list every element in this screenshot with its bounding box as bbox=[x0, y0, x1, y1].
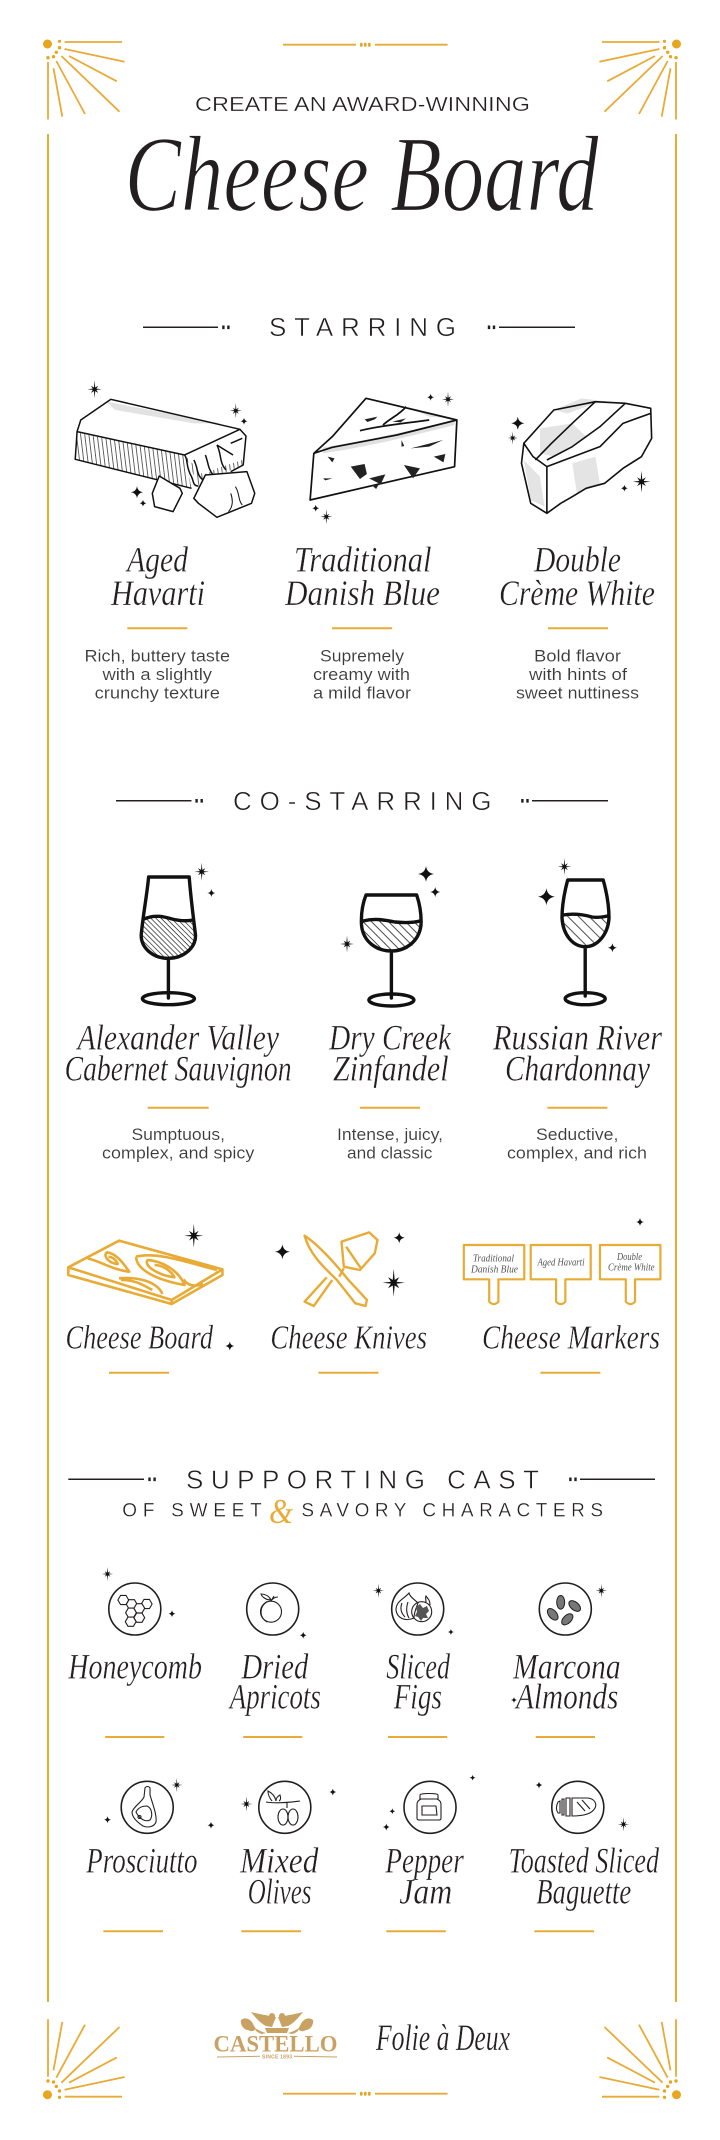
title kicker: CREATE AN AWARD-WINNING bbox=[195, 94, 530, 116]
sparkles bbox=[240, 1788, 336, 1812]
item: prosciutto bbox=[86, 1778, 214, 1931]
name bbox=[385, 1841, 465, 1911]
item: mixed olives bbox=[239, 1781, 336, 1931]
item: pepper jam bbox=[383, 1775, 476, 1931]
name: Honeycomb bbox=[68, 1646, 202, 1686]
description: complex, and rich bbox=[507, 1143, 647, 1162]
name: Aged bbox=[125, 540, 189, 580]
name: Double bbox=[533, 540, 621, 580]
description: Sumptuous, bbox=[132, 1125, 225, 1144]
description bbox=[516, 647, 639, 702]
frame ornament: bottom left corner bbox=[43, 2019, 125, 2099]
name bbox=[492, 1017, 663, 1089]
tool: cheese knives bbox=[270, 1232, 427, 1373]
name: Jam bbox=[399, 1871, 452, 1911]
frame ornament: top left corner bbox=[43, 40, 125, 120]
description: Bold flavor bbox=[534, 647, 621, 666]
icon: apricot bbox=[247, 1583, 299, 1635]
description: Rich, buttery taste bbox=[84, 647, 230, 666]
icon: olive branch bbox=[259, 1781, 311, 1833]
icon: crossed knives bbox=[305, 1232, 378, 1306]
name: Alexander Valley bbox=[76, 1017, 279, 1057]
name: Dry Creek bbox=[328, 1017, 452, 1057]
logo: castello: SINCE 1893 bbox=[262, 2054, 292, 2060]
description bbox=[84, 647, 230, 702]
marker labels: Aged Havarti bbox=[537, 1256, 584, 1268]
name: Cheese Board bbox=[66, 1319, 214, 1356]
icon: wooden board bbox=[68, 1241, 222, 1304]
description: Seductive, bbox=[536, 1125, 618, 1144]
sparkles bbox=[104, 1778, 214, 1829]
description: sweet nuttiness bbox=[516, 683, 639, 702]
tool: cheese board bbox=[66, 1224, 234, 1373]
name bbox=[386, 1646, 451, 1716]
name bbox=[284, 540, 440, 613]
name: Olives bbox=[248, 1871, 312, 1911]
logo: castello bbox=[214, 2012, 338, 2060]
description bbox=[313, 647, 411, 702]
heading: starring: STARRING bbox=[269, 312, 456, 342]
item: dried apricots bbox=[228, 1583, 321, 1737]
name: Cabernet Sauvignon bbox=[65, 1049, 292, 1089]
icon: danish blue wedge bbox=[310, 398, 457, 500]
marker labels: Traditional bbox=[473, 1253, 514, 1265]
item: toasted sliced baguette bbox=[509, 1781, 660, 1931]
sparkles bbox=[508, 417, 650, 493]
icon: wine glass bbox=[141, 877, 196, 1005]
icon: wine glass bbox=[361, 895, 421, 1006]
sparkles bbox=[373, 1584, 454, 1635]
subheading: & bbox=[269, 1492, 294, 1531]
title bbox=[125, 94, 599, 235]
name: Toasted Sliced bbox=[509, 1841, 660, 1881]
name: Sliced bbox=[386, 1646, 451, 1686]
name bbox=[512, 1646, 621, 1716]
sparkles bbox=[275, 1232, 405, 1297]
name: Traditional bbox=[294, 540, 432, 580]
heading: supporting cast: SUPPORTING CAST bbox=[186, 1464, 539, 1494]
cheese: aged havarti bbox=[75, 380, 255, 702]
wine: dry creek zinfandel bbox=[328, 866, 452, 1162]
icon: ham bbox=[121, 1781, 173, 1833]
sparkles bbox=[87, 380, 248, 507]
icon: double creme white wedge bbox=[521, 398, 652, 513]
icon: three marker flags bbox=[464, 1245, 660, 1304]
icon: figs bbox=[392, 1583, 444, 1635]
description: a mild flavor bbox=[313, 683, 411, 702]
marker labels: Danish Blue bbox=[470, 1263, 518, 1275]
name: Crème White bbox=[499, 573, 655, 613]
name: Apricots bbox=[228, 1676, 321, 1716]
wine: alexander valley cabernet sauvignon bbox=[65, 863, 292, 1162]
sparkles bbox=[194, 863, 215, 897]
frame ornament: top centre bbox=[283, 43, 448, 47]
name bbox=[499, 540, 655, 613]
description: Intense, juicy, bbox=[337, 1125, 443, 1144]
description: Supremely bbox=[320, 647, 405, 666]
sparkles bbox=[536, 1782, 629, 1831]
cheese: traditional danish blue bbox=[284, 392, 457, 702]
description: and classic bbox=[347, 1143, 433, 1162]
name bbox=[65, 1017, 292, 1089]
subheading: OF SWEET bbox=[122, 1501, 262, 1522]
logo: folie a deux: Folie à Deux bbox=[375, 2018, 510, 2059]
icon: baguette bbox=[552, 1781, 604, 1833]
name bbox=[110, 540, 205, 613]
heading: starring bbox=[143, 312, 575, 342]
heading: co-starring: CO-STARRING bbox=[233, 786, 492, 816]
name: Chardonnay bbox=[505, 1049, 650, 1089]
name: Cheese Markers bbox=[482, 1319, 660, 1356]
name: Russian River bbox=[492, 1017, 663, 1057]
marker labels bbox=[470, 1251, 655, 1275]
description bbox=[337, 1125, 443, 1162]
title main: Cheese Board bbox=[125, 116, 599, 235]
heading: supporting cast bbox=[68, 1464, 655, 1494]
name: Almonds bbox=[514, 1676, 618, 1716]
description: complex, and spicy bbox=[102, 1143, 255, 1162]
marker labels: Double bbox=[616, 1251, 642, 1263]
item: honeycomb bbox=[68, 1567, 202, 1737]
name bbox=[228, 1646, 321, 1716]
icon: aged havarti block bbox=[75, 399, 255, 517]
name: Marcona bbox=[512, 1646, 621, 1686]
subheading bbox=[122, 1492, 603, 1531]
description: creamy with bbox=[313, 665, 410, 684]
name: Figs bbox=[393, 1676, 442, 1716]
name: Havarti bbox=[110, 573, 205, 613]
sparkles bbox=[511, 1584, 607, 1703]
name: Cheese Knives bbox=[270, 1319, 427, 1356]
panel: starring bbox=[75, 312, 655, 702]
tool: cheese markers bbox=[464, 1218, 660, 1373]
name: Baguette bbox=[536, 1871, 631, 1911]
icon: castello crest bbox=[241, 2012, 313, 2034]
icon: almonds bbox=[539, 1583, 591, 1635]
sparkle bbox=[300, 1632, 307, 1639]
icon: jam jar bbox=[404, 1781, 456, 1833]
item: sliced figs bbox=[373, 1583, 454, 1737]
wine: russian river chardonnay bbox=[492, 858, 663, 1162]
icon: wine glass bbox=[562, 880, 609, 1005]
panel: supporting cast bbox=[68, 1464, 660, 1931]
description bbox=[507, 1125, 647, 1162]
sparkles bbox=[383, 1775, 476, 1830]
sparkle bbox=[636, 1218, 644, 1226]
description: with hints of bbox=[528, 665, 627, 684]
sparkles bbox=[538, 858, 617, 952]
logo: castello: CASTELLO bbox=[214, 2032, 338, 2057]
name: Mixed bbox=[239, 1841, 319, 1881]
sparkles bbox=[184, 1224, 234, 1350]
frame ornament: bottom right corner bbox=[599, 2019, 681, 2099]
sparkles bbox=[340, 866, 440, 952]
description: with a slightly bbox=[101, 665, 213, 684]
logos bbox=[214, 2012, 510, 2060]
description: crunchy texture bbox=[95, 683, 220, 702]
frame ornament: bottom centre bbox=[283, 2092, 448, 2096]
frame side lines bbox=[48, 134, 676, 2002]
frame ornament: top right corner bbox=[599, 40, 681, 120]
sparkles bbox=[312, 392, 454, 524]
subheading: SAVORY CHARACTERS bbox=[301, 1501, 603, 1522]
name bbox=[328, 1017, 452, 1089]
name: Danish Blue bbox=[284, 573, 440, 613]
name bbox=[239, 1841, 319, 1911]
name: Prosciutto bbox=[86, 1841, 198, 1881]
name: Zinfandel bbox=[333, 1049, 449, 1089]
cheese: double creme white bbox=[499, 398, 655, 702]
panel: co-starring bbox=[65, 786, 663, 1373]
item: marcona almonds bbox=[511, 1583, 621, 1737]
name: Dried bbox=[241, 1646, 309, 1686]
icon: honeycomb bbox=[109, 1583, 161, 1635]
heading: co-starring bbox=[116, 786, 608, 816]
marker labels: Crème White bbox=[608, 1262, 655, 1274]
name: Pepper bbox=[385, 1841, 465, 1881]
sparkles bbox=[102, 1567, 176, 1617]
name bbox=[509, 1841, 660, 1911]
description bbox=[102, 1125, 255, 1162]
